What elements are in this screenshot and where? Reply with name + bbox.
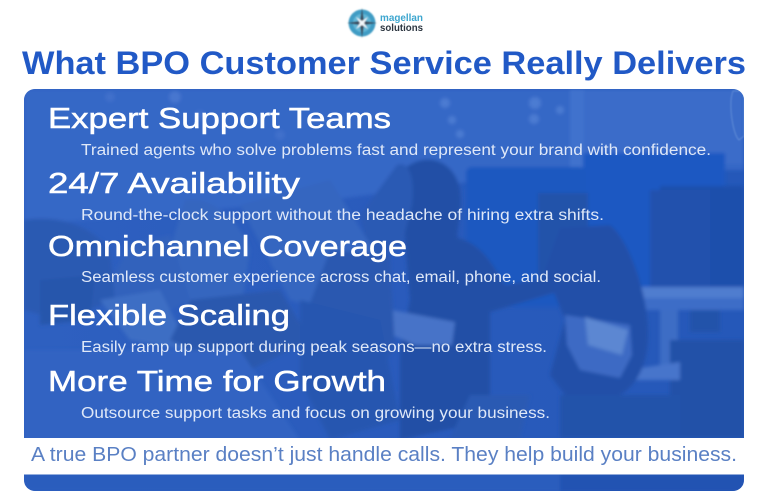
section: Expert Support Teams	[48, 103, 711, 159]
logo wordmark: solutions	[380, 22, 423, 34]
description: Round-the-clock support without the headache of hiring extra shifts.	[81, 207, 604, 224]
description: Trained agents who solve problems fast and represent your brand with confidence.	[81, 142, 711, 159]
heading: Omnichannel Coverage	[48, 231, 407, 263]
heading: More Time for Growth	[48, 366, 386, 398]
section: More Time for Growth	[48, 366, 550, 422]
heading: Expert Support Teams	[48, 103, 391, 135]
section: Omnichannel Coverage	[48, 231, 601, 286]
panel: office photo background	[24, 89, 744, 492]
description: Seamless customer experience across chat, email, phone, and social.	[81, 269, 601, 286]
section: 24/7 Availability	[48, 168, 604, 224]
description: Outsource support tasks and focus on growing your business.	[81, 405, 550, 422]
band background	[24, 438, 744, 474]
closing statement: A true BPO partner doesn’t just handle calls. They help build your business.	[31, 444, 737, 466]
logo wordmark: magellan	[380, 12, 423, 24]
description: Easily ramp up support during peak seasons—no extra stress.	[81, 339, 547, 356]
logo	[347, 8, 423, 38]
heading: Flexible Scaling	[48, 300, 290, 332]
logo wordmark	[380, 12, 423, 34]
heading: 24/7 Availability	[48, 168, 301, 200]
section: Flexible Scaling	[48, 300, 547, 356]
title: What BPO Customer Service Really Delivers	[22, 45, 746, 81]
closing statement band	[24, 438, 744, 474]
icon: compass	[347, 8, 377, 38]
